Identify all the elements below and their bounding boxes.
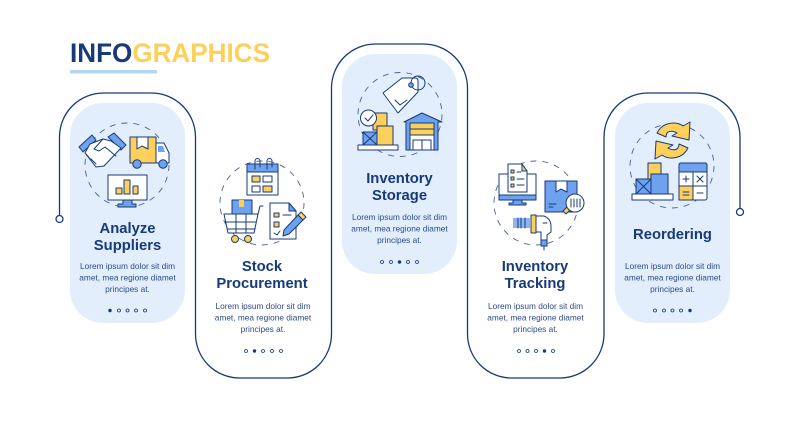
- panel: stock procurement: [215, 158, 312, 353]
- pagination dots: [244, 349, 282, 353]
- text block: amet, mea regione diamet: [79, 272, 176, 282]
- text block: Lorem ipsum dolor sit dim: [352, 212, 447, 222]
- heading: Storage: [372, 188, 427, 204]
- pagination dots: [654, 309, 692, 312]
- text block: amet, mea regione diamet: [624, 272, 721, 282]
- title: INFOGRAPHICS: [70, 38, 270, 68]
- pagination dots: [380, 260, 418, 264]
- panel: analyze suppliers: [79, 123, 176, 312]
- panel: inventory tracking: [487, 161, 584, 353]
- icon: monitor, box and scanner: [494, 161, 584, 250]
- heading: Stock: [242, 259, 283, 275]
- heading: Inventory: [502, 259, 569, 275]
- panel backgrounds: [70, 54, 730, 323]
- text block: principes at.: [650, 284, 695, 294]
- text block: Lorem ipsum dolor sit dim: [488, 301, 583, 311]
- text block: Lorem ipsum dolor sit dim: [80, 261, 175, 271]
- heading: Procurement: [216, 276, 308, 292]
- heading: Tracking: [505, 276, 565, 292]
- connecting outline: [56, 44, 744, 378]
- panel: inventory storage: [351, 72, 448, 264]
- panel: reordering: [624, 122, 721, 312]
- heading: Suppliers: [94, 238, 161, 254]
- text block: amet, mea regione diamet: [351, 224, 448, 234]
- icon: tag, boxes and warehouse: [358, 72, 442, 156]
- heading: Reordering: [633, 227, 712, 243]
- text block: Lorem ipsum dolor sit dim: [625, 261, 720, 271]
- text block: Lorem ipsum dolor sit dim: [216, 301, 311, 311]
- icon: arrows, boxes and calculator: [630, 122, 714, 208]
- pagination dots: [108, 309, 146, 312]
- icon: calendar, cart and checklist: [220, 158, 306, 245]
- text block: amet, mea regione diamet: [215, 312, 312, 322]
- text block: principes at.: [377, 235, 422, 245]
- text block: principes at.: [105, 284, 150, 294]
- icon: handshake, truck and chart: [79, 123, 169, 207]
- pagination dots: [518, 349, 554, 353]
- text block: principes at.: [241, 324, 285, 334]
- text block: amet, mea regione diamet: [487, 312, 584, 322]
- text block: principes at.: [513, 324, 558, 334]
- heading: Inventory: [366, 171, 434, 187]
- heading: Analyze: [100, 221, 155, 237]
